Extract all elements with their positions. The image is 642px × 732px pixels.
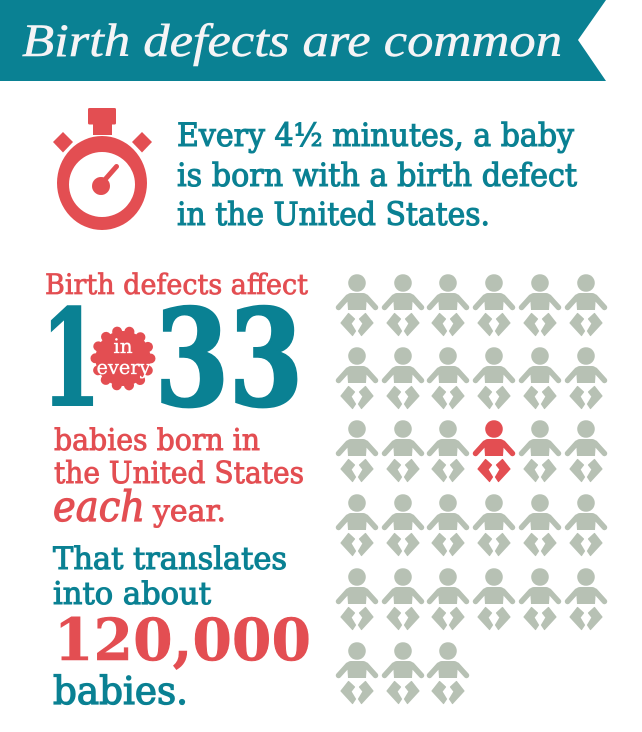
text: babies born each year — [53, 423, 304, 531]
text: babies born each year: the United States — [54, 456, 304, 491]
icon: stopwatch — [53, 108, 152, 230]
text: babies born each year: year. — [152, 494, 226, 529]
pictogram: 33 babies — [338, 274, 604, 704]
title: Birth defects are common — [22, 15, 562, 67]
badge: in every: every — [96, 355, 151, 379]
statement: every 4 and a half minutes — [177, 116, 577, 233]
big statistic: 1 in every 33: 33 — [155, 281, 303, 437]
icon: highlighted red baby — [476, 420, 512, 482]
statement: every 4 and a half minutes: Every 4½ minutes, a baby — [177, 116, 574, 154]
text: that translates into about: into about — [53, 576, 212, 612]
heading: birth defects affect: Birth defects affect — [45, 268, 309, 301]
big statistic: 1 in every 33: 1 — [41, 281, 101, 437]
text: babies born each year: each — [53, 482, 145, 531]
big number: 120,000: 120,000 — [54, 606, 311, 674]
text: that translates into about: That translates — [53, 541, 287, 577]
banner — [0, 0, 606, 81]
statement: every 4 and a half minutes: is born with a birth defect — [177, 156, 577, 194]
badge: in every: in — [113, 334, 133, 358]
badge: in every — [96, 331, 151, 386]
statement: every 4 and a half minutes: in the United States. — [177, 195, 490, 233]
text: that translates into about — [53, 541, 287, 612]
text: babies: babies. — [53, 669, 188, 713]
text: babies born each year: babies born in — [54, 423, 260, 458]
big statistic: 1 in every 33 — [41, 281, 303, 437]
